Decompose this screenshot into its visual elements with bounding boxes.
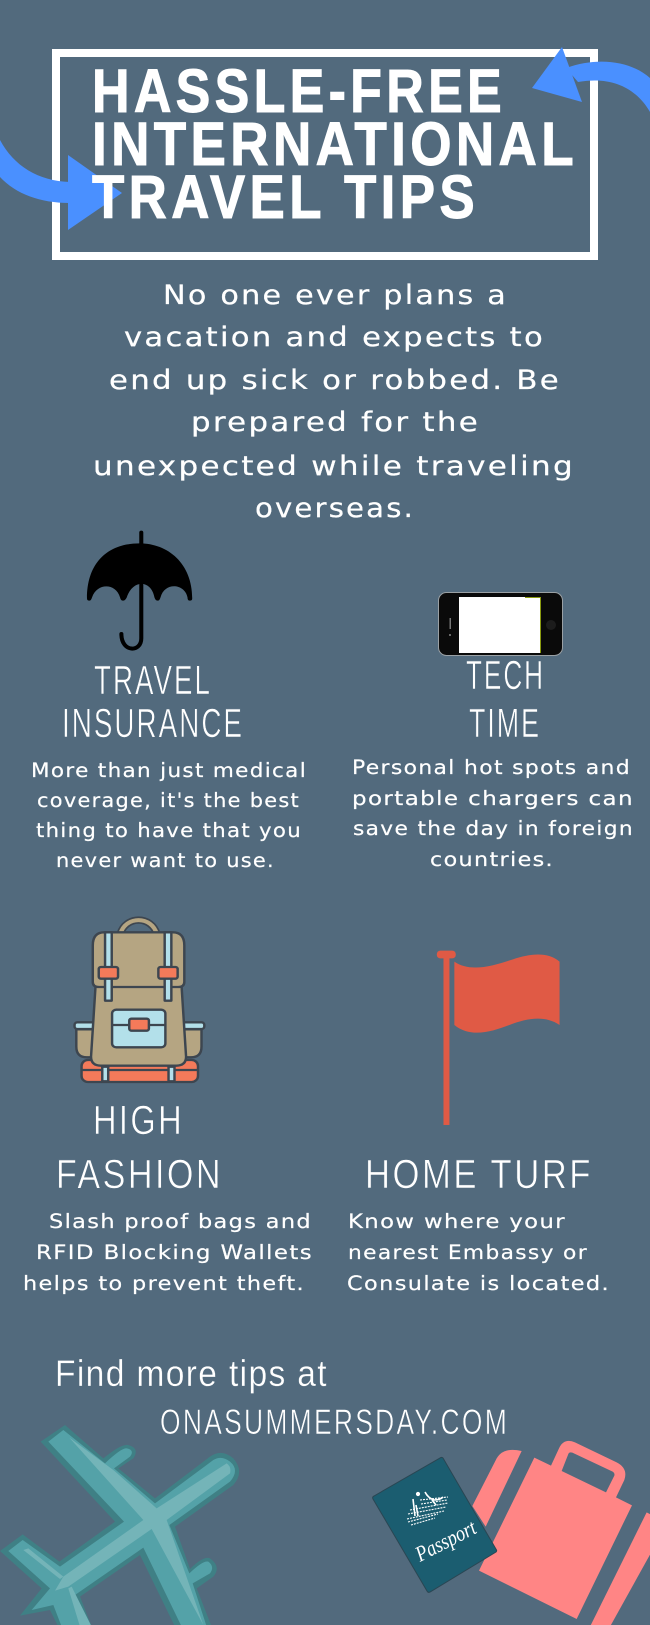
text: travel insurance: More than just medical — [31, 759, 307, 782]
text: high fashion — [23, 1210, 313, 1295]
text: travel insurance: never want to use. — [56, 849, 275, 872]
passport label: Passport — [410, 1514, 481, 1567]
icon: umbrella — [87, 531, 192, 649]
text: home turf — [347, 1210, 610, 1295]
heading: tech time: TECH — [466, 652, 545, 698]
text: tech time: save the day in foreign — [353, 817, 634, 840]
passport cover — [373, 1457, 497, 1592]
heading: travel insurance: TRAVEL — [94, 657, 212, 703]
title: INTERNATIONAL — [92, 110, 578, 178]
text: travel insurance — [31, 759, 307, 872]
panel: home turf — [347, 951, 610, 1295]
intro paragraph: prepared for the — [191, 407, 480, 438]
footer text — [55, 1353, 509, 1442]
text: travel insurance: thing to have that you — [36, 819, 302, 842]
footer text: Find more tips at — [55, 1353, 328, 1394]
title — [92, 57, 578, 231]
heading: tech time: TIME — [469, 700, 541, 746]
title: TRAVEL TIPS — [92, 163, 479, 231]
panel: tech time — [352, 592, 634, 871]
text: tech time: portable chargers can — [352, 787, 634, 810]
arrow: left blue — [0, 140, 122, 230]
icon: smartphone — [438, 592, 562, 656]
icon: backpack — [75, 920, 204, 1082]
passport emblem — [407, 1492, 448, 1525]
footer text: ONASUMMERSDAY.COM — [160, 1403, 509, 1442]
text: tech time — [352, 756, 634, 871]
text: home turf: Consulate is located. — [347, 1272, 610, 1295]
arrow: right blue — [532, 47, 650, 112]
heading: travel insurance: INSURANCE — [62, 700, 244, 746]
heading: travel insurance — [62, 657, 244, 746]
intro paragraph: overseas. — [255, 493, 415, 524]
heading: high fashion: FASHION — [56, 1151, 223, 1197]
icon: flag — [437, 951, 560, 1125]
text: travel insurance: coverage, it's the best — [37, 789, 300, 812]
intro paragraph — [93, 280, 575, 524]
title: HASSLE-FREE — [92, 57, 506, 125]
illustration: suitcase — [472, 1441, 650, 1625]
illustration: passport — [373, 1457, 497, 1592]
intro paragraph: No one ever plans a — [163, 280, 508, 311]
heading: home turf: HOME TURF — [365, 1151, 593, 1197]
text: high fashion: Slash proof bags and — [49, 1210, 312, 1233]
intro paragraph: vacation and expects to — [124, 322, 545, 353]
intro paragraph: unexpected while traveling — [93, 451, 575, 482]
text: home turf: nearest Embassy or — [348, 1241, 588, 1264]
intro paragraph: end up sick or robbed. Be — [109, 365, 561, 396]
text: home turf: Know where your — [348, 1210, 566, 1233]
heading: high fashion — [56, 1097, 223, 1197]
heading: high fashion: HIGH — [93, 1097, 184, 1143]
text: tech time: Personal hot spots and — [352, 756, 631, 779]
heading: tech time — [466, 652, 545, 746]
text: high fashion: helps to prevent theft. — [23, 1272, 305, 1295]
text: tech time: countries. — [430, 848, 554, 871]
illustration: airplane — [0, 1425, 239, 1625]
text: high fashion: RFID Blocking Wallets — [36, 1241, 313, 1264]
panel: travel insurance — [31, 531, 307, 872]
title frame — [56, 53, 594, 256]
panel: high fashion — [23, 920, 313, 1295]
